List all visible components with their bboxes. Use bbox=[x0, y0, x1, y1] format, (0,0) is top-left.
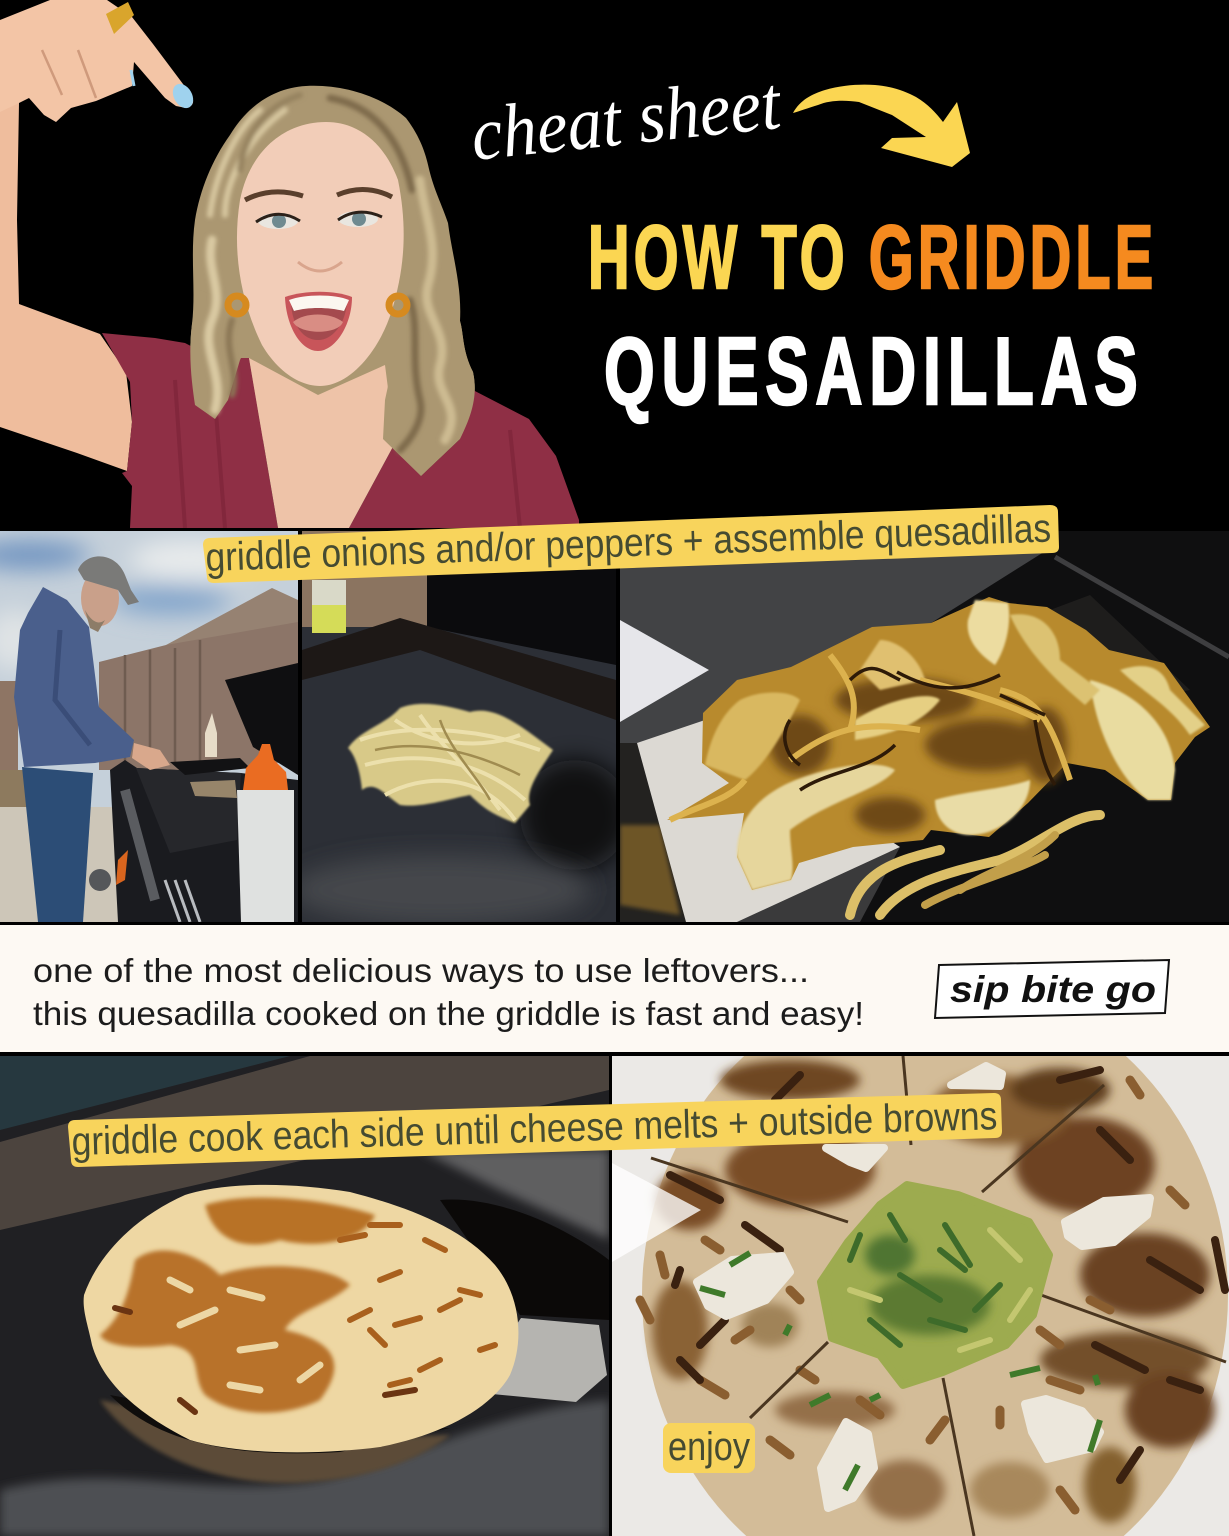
photo: woman pointing bbox=[0, 0, 579, 528]
title line: how to griddle: HOW TO GRIDDLE bbox=[588, 208, 1153, 308]
crema dollops bbox=[697, 1066, 1150, 1508]
callout: griddle cook label: griddle cook each side until cheese melts + outside browns bbox=[71, 1094, 998, 1164]
black spatula tip bbox=[1050, 595, 1190, 700]
char marks bbox=[340, 1225, 495, 1385]
quesadilla base bbox=[642, 980, 1228, 1536]
panel: intro text band bbox=[0, 925, 1229, 1052]
arm bbox=[0, 100, 132, 471]
callout: enjoy label: enjoy bbox=[668, 1425, 750, 1469]
squeeze bottle bbox=[237, 744, 294, 922]
arrow: yellow curved arrow bbox=[793, 85, 970, 167]
earrings bbox=[228, 296, 407, 314]
pointing hand bbox=[0, 0, 197, 122]
nose bbox=[298, 262, 342, 271]
hair front locks bbox=[190, 95, 475, 476]
griddle dark under quesadilla bbox=[110, 1395, 450, 1453]
griddle rim bbox=[0, 1056, 609, 1230]
grill lid bbox=[225, 663, 298, 775]
teal background corner bbox=[0, 1056, 290, 1130]
fence bbox=[99, 622, 298, 770]
blue fingernail bbox=[172, 84, 194, 108]
quesadilla bbox=[84, 1185, 518, 1452]
arrow: photo sequence play triangle 1 bbox=[620, 620, 709, 722]
title bbox=[588, 208, 1153, 425]
head bbox=[81, 580, 119, 626]
oil bottle bbox=[312, 580, 346, 633]
griddle rim bbox=[302, 618, 616, 720]
jeans bbox=[22, 767, 93, 922]
logo: sip bite go: sip bite go bbox=[950, 969, 1156, 1010]
griddle background bbox=[0, 1056, 609, 1536]
hoodie bbox=[14, 587, 134, 767]
maroon top bbox=[102, 333, 579, 528]
sky bbox=[0, 531, 298, 807]
dark oil patch bbox=[440, 1200, 609, 1320]
panel: finished quesadilla photo bbox=[612, 980, 1229, 1536]
band background bbox=[0, 925, 1229, 1052]
griddle lower corner bbox=[620, 743, 686, 922]
small oil bottle bbox=[205, 713, 217, 757]
griddled onions bbox=[348, 704, 553, 823]
left fence bbox=[0, 681, 18, 771]
plate background bbox=[612, 1056, 1229, 1536]
black grill lid bbox=[427, 568, 616, 665]
left eye bbox=[258, 213, 298, 229]
lower onions bbox=[850, 815, 1100, 915]
dark griddle area bbox=[520, 760, 630, 870]
browned patches bbox=[205, 1198, 375, 1244]
griddle background bbox=[620, 531, 1229, 922]
onion pile bbox=[667, 597, 1210, 890]
slice cuts bbox=[651, 1056, 1226, 1536]
oily shadow under quesadilla bbox=[100, 1400, 450, 1483]
neck and chest bbox=[249, 358, 395, 528]
title line: quesadillas: QUESADILLAS bbox=[604, 319, 1138, 425]
eyebrows bbox=[245, 189, 392, 200]
herbs bbox=[700, 1253, 1100, 1490]
intro line 2: this quesadilla cooked on the griddle is fast and easy! bbox=[33, 995, 864, 1032]
pale onion slices bbox=[737, 765, 895, 890]
griddle rim bbox=[1055, 557, 1229, 657]
spatula bbox=[637, 720, 900, 922]
dark caramelized centre bbox=[770, 678, 1067, 833]
panel: caramelized onions photo bbox=[620, 531, 1229, 922]
panel: griddling quesadilla photo bbox=[0, 1056, 609, 1536]
cream highlights on patches bbox=[170, 1280, 320, 1390]
brown speckles bbox=[640, 1080, 1185, 1510]
roof bbox=[166, 588, 298, 650]
hand and spatula bbox=[132, 743, 170, 770]
callout: griddle onions label: griddle onions and/or peppers + assemble quesadillas bbox=[205, 506, 1052, 580]
panel: man at griddle photo bbox=[0, 531, 298, 922]
griddle surface light bbox=[420, 1150, 609, 1240]
browned patches bbox=[652, 1060, 1215, 1523]
griddle background bbox=[302, 627, 616, 922]
face bbox=[237, 122, 404, 386]
panel: header photo bbox=[0, 0, 579, 528]
wood fence bbox=[302, 531, 427, 627]
char marks bbox=[670, 1070, 1225, 1480]
man bbox=[14, 556, 250, 922]
spatula bbox=[471, 1318, 607, 1402]
handwritten heading: cheat sheet: cheat sheet bbox=[467, 62, 786, 177]
ring bbox=[106, 2, 134, 34]
grey griddle surface bbox=[620, 545, 1055, 743]
hair back bbox=[190, 86, 475, 476]
logo: sip bite go bbox=[935, 960, 1169, 1018]
ground bbox=[0, 770, 26, 807]
griddle bbox=[89, 760, 298, 922]
cap bbox=[78, 556, 139, 605]
panel: griddle onions photo bbox=[290, 531, 630, 925]
open mouth bbox=[285, 292, 352, 351]
intro line 1: one of the most delicious ways to use leftovers... bbox=[33, 952, 809, 989]
arrow: photo sequence play triangle 2 bbox=[612, 1163, 701, 1262]
right eye bbox=[338, 211, 378, 227]
guacamole bbox=[821, 1185, 1049, 1385]
